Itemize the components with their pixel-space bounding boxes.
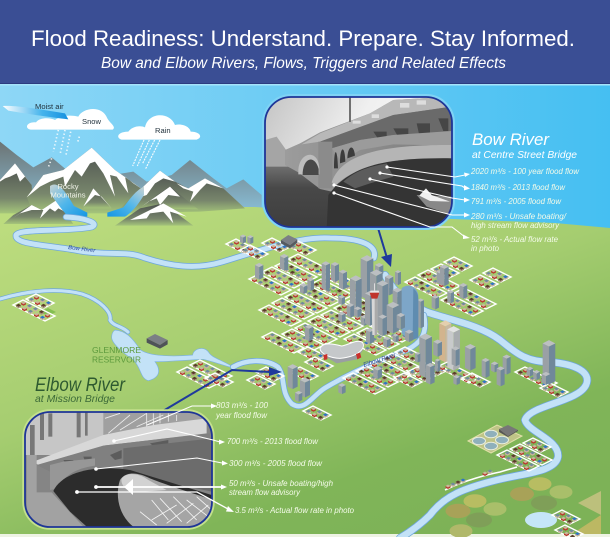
label: rocky mountains: Rocky xyxy=(57,182,79,191)
elbow flow labels: 300 m³/s - 2005 flood flow xyxy=(229,459,323,468)
bow flow labels: 1840 m³/s - 2013 flood flow xyxy=(471,183,566,192)
label: rain: Rain xyxy=(155,126,171,135)
bow flow labels xyxy=(470,167,580,253)
bow flow labels: 2020 m³/s - 100 year flood flow xyxy=(470,167,580,176)
bow flow labels: in photo xyxy=(471,244,500,253)
elbow flow labels: 700 m³/s - 2013 flood flow xyxy=(227,437,319,446)
calgary tower xyxy=(370,283,379,335)
elbow flow labels xyxy=(215,401,355,515)
icon: blue arrow right xyxy=(107,187,144,217)
water treatment plant xyxy=(468,425,522,453)
panel: bow river photo xyxy=(264,96,453,228)
subheading: centre street bridge: at Centre Street Bridge xyxy=(472,149,577,161)
elbow river flow lines xyxy=(75,404,234,512)
icon: rainfall xyxy=(133,140,160,169)
icon: blue arrow left xyxy=(50,185,87,217)
subheading: mission bridge: at Mission Bridge xyxy=(35,393,115,405)
warehouse north xyxy=(281,235,297,248)
title: Flood Readiness: Understand. Prepare. Stay Informed. xyxy=(31,26,575,51)
heading: bow river: Bow River xyxy=(472,130,550,149)
ground xyxy=(0,207,610,534)
elbow river lower xyxy=(233,315,425,406)
elbow flow labels: 50 m³/s - Unsafe boating/high xyxy=(229,479,334,488)
icon: snow cloud xyxy=(27,109,114,130)
stadium xyxy=(320,341,363,363)
bow flow labels: 52 m³/s - Actual flow rate xyxy=(471,235,559,244)
bow flow labels: 791 m³/s - 2005 flood flow xyxy=(471,197,562,206)
farm fields xyxy=(446,477,601,537)
sky xyxy=(0,84,610,234)
elbow flow labels: stream flow advisory xyxy=(229,488,301,497)
label: rocky mountains: Mountains xyxy=(50,190,86,199)
label: moist air: Moist air xyxy=(35,102,64,111)
bottom strip xyxy=(0,534,610,537)
arrow: bow photo to downtown xyxy=(378,228,392,267)
label: reservoir: RESERVOIR xyxy=(92,354,141,364)
label: elbow river: Elbow River xyxy=(362,352,397,369)
header band xyxy=(0,0,610,86)
glenmore reservoir xyxy=(112,330,235,381)
back mountains xyxy=(0,142,262,220)
bow flow labels: high stream flow advisory xyxy=(471,221,560,230)
icon: snowfall xyxy=(48,130,79,167)
residential blocks xyxy=(13,238,583,537)
elbow flow labels: 803 m³/s - 100 xyxy=(216,401,269,410)
label: glenmore: GLENMORE xyxy=(92,345,141,355)
city parks xyxy=(40,268,344,334)
front mountains xyxy=(0,148,245,226)
heading: elbow river: Elbow River xyxy=(35,375,126,396)
bow river upper xyxy=(16,217,375,266)
downtown and skyscrapers xyxy=(240,234,555,402)
icon: moist air arrow xyxy=(3,106,68,119)
arrow: elbow photo to river xyxy=(163,367,282,411)
pond xyxy=(525,512,557,528)
bow river flow lines xyxy=(332,165,470,239)
panel: elbow river photo xyxy=(24,411,213,528)
elbow river upper xyxy=(0,291,128,332)
label: bow river: Bow River xyxy=(68,245,97,254)
south east road xyxy=(445,467,517,490)
subtitle: Bow and Elbow Rivers, Flows, Triggers and Related Effects xyxy=(101,55,506,72)
bow river lower xyxy=(385,275,587,537)
bow flow labels: 280 m³/s - Unsafe boating/ xyxy=(470,212,567,221)
elbow flow labels: year flood flow xyxy=(215,411,268,420)
elbow flow labels: 3.5 m³/s - Actual flow rate in photo xyxy=(235,506,355,515)
icon: rain cloud xyxy=(118,115,200,140)
label: snow: Snow xyxy=(82,117,102,126)
warehouse glenmore xyxy=(147,334,168,349)
